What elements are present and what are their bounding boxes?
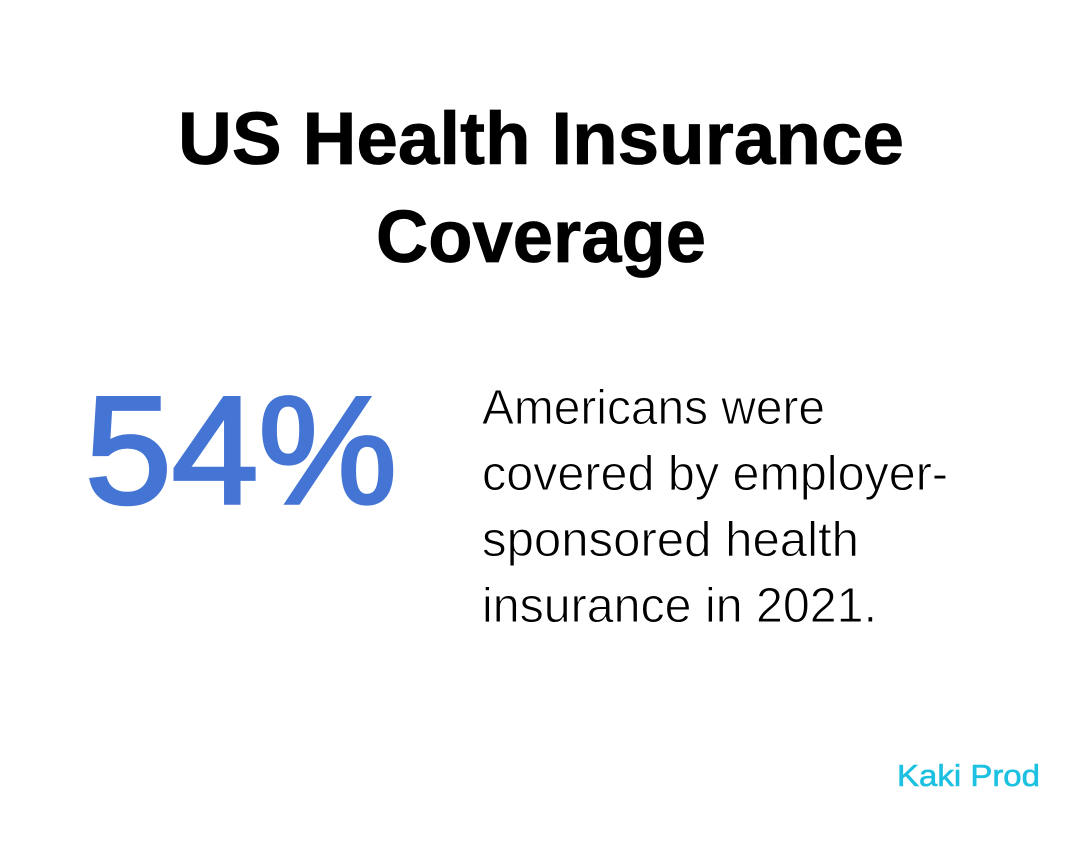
description text: Americans were <box>482 381 825 435</box>
description text: sponsored health <box>482 513 859 567</box>
description text <box>482 381 948 633</box>
big statistic: 54%: 54% <box>85 365 397 536</box>
brand logo: Kaki Prod: Kaki Prod <box>897 758 1040 793</box>
title <box>178 97 904 278</box>
title: Coverage <box>376 195 706 278</box>
description text: insurance in 2021. <box>482 579 877 633</box>
title: US Health Insurance <box>178 97 904 180</box>
description text: covered by employer- <box>482 447 948 501</box>
